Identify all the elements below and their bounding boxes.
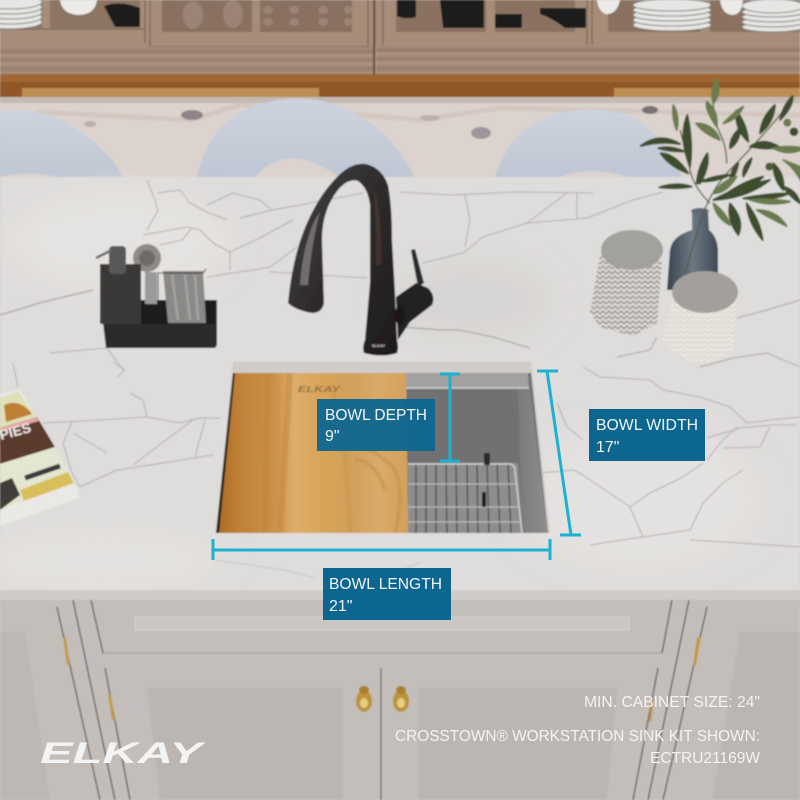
sink bbox=[216, 362, 550, 533]
model number: ECTRU21169W bbox=[650, 750, 760, 767]
length callout: BOWL LENGTH bbox=[329, 576, 442, 593]
stacked plates bbox=[0, 0, 800, 32]
canisters and vase bbox=[590, 208, 738, 363]
sink rim bbox=[216, 362, 550, 533]
glassware bbox=[183, 0, 352, 29]
ledge bbox=[406, 373, 529, 388]
upper cabinets with shelves bbox=[0, 0, 800, 47]
faucet base logo: ELKAY bbox=[372, 343, 386, 348]
white bowls bbox=[60, 0, 743, 15]
marble veins bbox=[0, 180, 800, 585]
caddy tray bbox=[103, 300, 217, 348]
depth callout: 9" bbox=[325, 428, 340, 445]
length callout bbox=[323, 568, 451, 620]
canister 1 bbox=[590, 230, 663, 336]
brown band bbox=[0, 417, 55, 464]
neck highlight bbox=[374, 190, 381, 265]
glass vase bbox=[667, 208, 718, 290]
sponge bbox=[163, 271, 206, 323]
bowl floor bbox=[408, 463, 522, 533]
width callout: BOWL WIDTH bbox=[596, 417, 698, 434]
cabinet seams bbox=[57, 600, 707, 800]
minimum cabinet size: MIN. CABINET SIZE: 24" bbox=[584, 694, 760, 711]
stool: left bbox=[0, 111, 123, 177]
kit shown: CROSSTOWN® WORKSTATION SINK KIT SHOWN: bbox=[395, 728, 760, 745]
brass knob right bbox=[393, 686, 409, 712]
bowl interior bbox=[406, 373, 548, 533]
rug bbox=[0, 97, 800, 179]
recipe book bbox=[0, 389, 79, 526]
product note text bbox=[395, 694, 760, 767]
cover photo bbox=[0, 391, 37, 428]
soap caddy bbox=[96, 244, 217, 348]
wood floor bbox=[0, 74, 800, 98]
dark gap left of board bbox=[216, 373, 236, 533]
wire grid bbox=[408, 453, 522, 533]
right wall bbox=[518, 389, 548, 533]
depth callout: BOWL DEPTH bbox=[325, 407, 427, 424]
depth arrow bbox=[440, 374, 460, 461]
countertop marble bbox=[0, 177, 800, 600]
spout highlight bbox=[300, 212, 320, 285]
handle bbox=[396, 283, 433, 340]
Elkay logo: ELKAY bbox=[40, 737, 207, 770]
cabinet base slats bbox=[0, 0, 800, 74]
dimension: bowl width bbox=[537, 371, 705, 535]
base cabinets bbox=[0, 600, 800, 800]
drawer slot bbox=[135, 617, 629, 630]
brass knob left bbox=[356, 686, 372, 712]
countertop front edge bbox=[0, 590, 800, 600]
brass hinges bbox=[63, 637, 701, 722]
plant branch bbox=[641, 79, 800, 273]
soap bottle bbox=[100, 264, 141, 324]
board logo: ELKAY bbox=[298, 385, 341, 394]
length callout: 21" bbox=[329, 598, 352, 615]
width callout bbox=[589, 409, 705, 461]
stool: right bbox=[495, 109, 682, 177]
width callout: 17" bbox=[596, 439, 619, 456]
width arrow bbox=[537, 371, 581, 535]
dimension: bowl depth bbox=[317, 374, 460, 461]
stool: center bbox=[197, 98, 414, 177]
canister 2 bbox=[662, 271, 738, 363]
brush bbox=[133, 244, 161, 304]
cover food photo bbox=[0, 447, 75, 510]
door recessed panels bbox=[147, 688, 343, 800]
depth callout bbox=[317, 399, 435, 451]
length arrow bbox=[213, 539, 550, 560]
spout bbox=[288, 164, 398, 356]
cutting board bbox=[219, 373, 408, 533]
dark serving items bbox=[104, 0, 586, 28]
dimension: bowl length bbox=[213, 539, 550, 620]
faucet bbox=[288, 164, 433, 356]
bar stool backs bbox=[0, 98, 682, 177]
